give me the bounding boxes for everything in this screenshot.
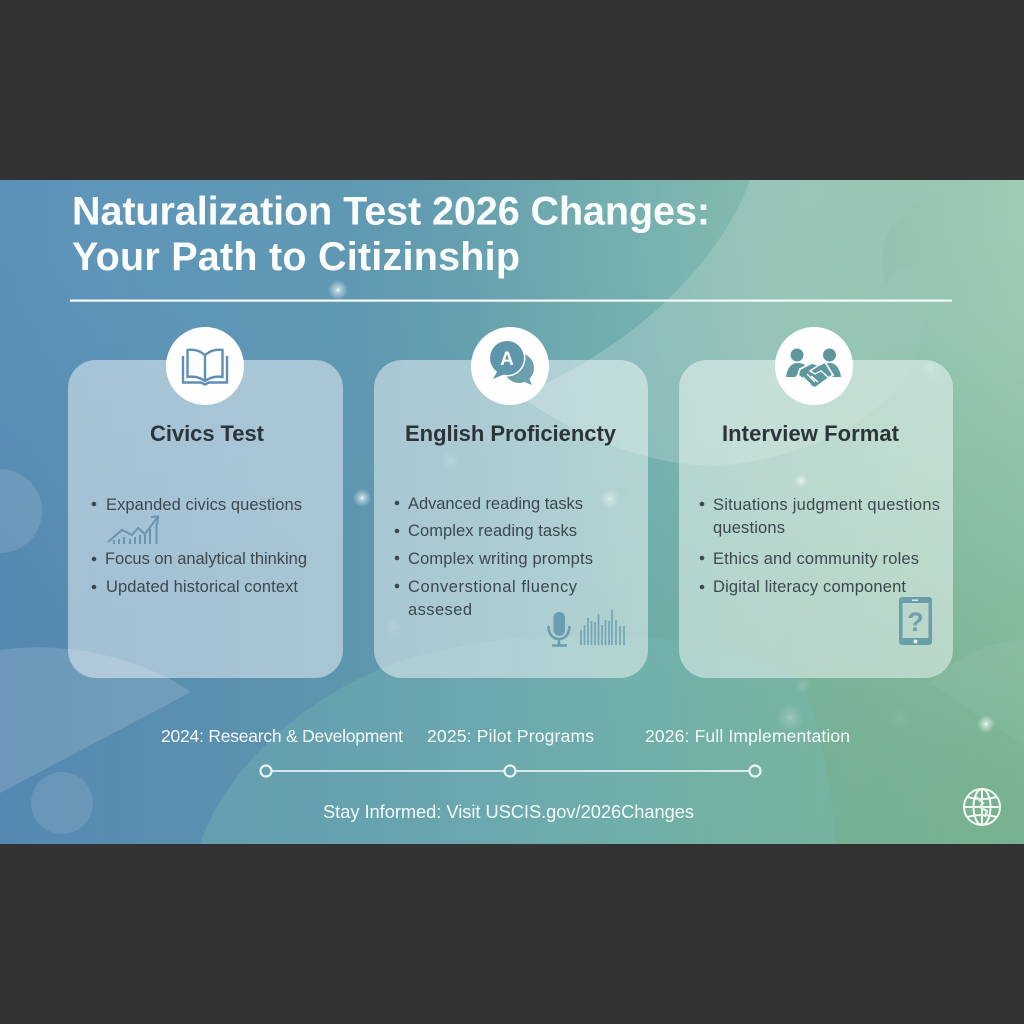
icon: sound wave xyxy=(581,610,624,645)
english bullets: assesed xyxy=(408,601,472,619)
english bullets: Converstional fluency xyxy=(408,578,578,596)
icon: microphone xyxy=(548,612,570,646)
english bullets xyxy=(395,495,593,619)
civics bullets: Focus on analytical thinking xyxy=(105,550,307,568)
civics bullets: Expanded civics questions xyxy=(106,496,302,514)
icon: speech bubbles xyxy=(471,327,549,405)
interview bullets: Ethics and community roles xyxy=(713,550,919,568)
icon: globe xyxy=(964,789,1000,825)
interview bullets: questions xyxy=(713,519,785,537)
icon: handshake xyxy=(775,327,853,405)
icon: tablet with question mark xyxy=(899,597,932,645)
english bullets: Complex writing prompts xyxy=(408,550,593,568)
timeline labels: 2026: Full Implementation xyxy=(645,726,850,746)
title: Your Path to Citizinship xyxy=(72,235,520,279)
timeline labels: 2025: Pilot Programs xyxy=(427,726,594,746)
panel: civics test xyxy=(68,327,343,678)
timeline xyxy=(260,766,760,776)
icon: open book xyxy=(166,327,244,405)
panel: english proficiency xyxy=(374,327,648,678)
icon: speech bubbles: A xyxy=(500,349,514,370)
title: Naturalization Test 2026 Changes: xyxy=(72,190,710,234)
footer call to action: Stay Informed: Visit USCIS.gov/2026Changes xyxy=(323,801,694,822)
interview bullets xyxy=(700,496,940,596)
icon: tablet with question mark: ? xyxy=(907,607,924,637)
interview bullets: Situations judgment questions xyxy=(713,496,940,514)
heading: english proficiency: English Proficiencty xyxy=(405,421,617,446)
icon: rising chart xyxy=(108,516,158,544)
civics bullets xyxy=(92,496,307,596)
heading: interview format: Interview Format xyxy=(722,421,900,446)
top dark band xyxy=(0,0,1024,180)
interview bullets: Digital literacy component xyxy=(713,578,906,596)
english bullets: Complex reading tasks xyxy=(408,522,577,540)
panel: interview format xyxy=(679,327,953,678)
english bullets: Advanced reading tasks xyxy=(408,495,583,513)
heading: civics test: Civics Test xyxy=(150,421,265,446)
title xyxy=(72,190,710,279)
sparkles xyxy=(328,280,995,733)
timeline labels: 2024: Research & Development xyxy=(161,726,403,746)
civics bullets: Updated historical context xyxy=(106,578,298,596)
timeline labels xyxy=(161,726,850,746)
bottom dark band xyxy=(0,844,1024,1024)
gradient background panel xyxy=(0,180,1024,844)
